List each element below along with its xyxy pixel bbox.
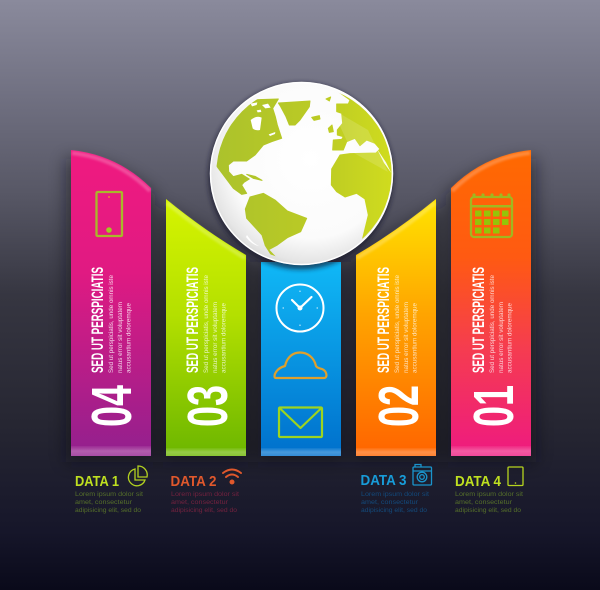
blue band shape: [261, 262, 341, 456]
globe: [210, 82, 413, 265]
iceland and british isles: [312, 116, 320, 120]
caribbean islands: [247, 174, 262, 180]
panel: band 03: [166, 199, 246, 456]
number 02: 02: [367, 385, 431, 427]
icon: tablet: [508, 467, 523, 486]
greenland: [278, 101, 310, 125]
icon: pie chart: [128, 466, 147, 486]
text data 3: [361, 491, 429, 514]
text data 2: Lorem ipsum dolor sit: [171, 491, 239, 498]
heading 03: SED UT PERSPICIATIS: [184, 267, 202, 373]
body text 02: Sed ut perspiciatis, unde omnis iste: [394, 275, 401, 373]
body text 04: Sed ut perspiciatis, unde omnis iste: [108, 275, 115, 373]
band 01 shape: [451, 150, 531, 456]
body text 04: natus error sit voluptatem: [117, 302, 124, 373]
icon: smartphone: [96, 192, 122, 236]
globe glint: [246, 235, 259, 246]
body text 01: Sed ut perspiciatis, unde omnis iste: [489, 275, 496, 373]
body text 01: accusantium doloremque: [506, 303, 514, 373]
body text 01: natus error sit voluptatem: [498, 302, 505, 373]
icon: wifi: [223, 470, 241, 484]
text data 1: Lorem ipsum dolor sit: [75, 491, 143, 498]
south america: [245, 193, 307, 262]
body text 02: accusantium doloremque: [412, 303, 418, 373]
text data 2: adipisicing elit, sed do: [171, 507, 238, 514]
text data 2: amet, consectetur: [171, 499, 228, 506]
icon: clock: [276, 284, 324, 332]
heading data 2: DATA 2: [170, 473, 216, 490]
text data 1: amet, consectetur: [75, 499, 132, 506]
heading 04: SED UT PERSPICIATIS: [89, 267, 107, 373]
data block 1: [75, 466, 147, 514]
icon: cloud: [274, 352, 326, 378]
data block 4: [455, 467, 523, 514]
heading data 1: DATA 1: [75, 473, 119, 490]
band 02 shape: [356, 199, 436, 456]
body text 03: [203, 275, 228, 373]
body text 03: Sed ut perspiciatis, unde omnis iste: [203, 275, 210, 373]
data block 2: [170, 470, 241, 514]
text data 3: Lorem ipsum dolor sit: [361, 491, 429, 498]
heading 02: SED UT PERSPICIATIS: [375, 267, 393, 373]
body text 04: accusantium doloremque: [126, 303, 132, 373]
icon: calendar: [471, 193, 512, 237]
arctic islands and hudson bay: [251, 102, 391, 173]
body text 02: [394, 275, 418, 373]
heading data 3: DATA 3: [360, 472, 406, 489]
text data 4: [455, 491, 523, 514]
continents: [216, 92, 392, 256]
panel: band 04: [71, 150, 151, 456]
data block 3: [360, 464, 432, 514]
icon: camera: [413, 464, 432, 485]
panel: blue centre band: [261, 262, 341, 456]
number 01: 01: [462, 385, 526, 427]
text data 1: adipisicing elit, sed do: [75, 507, 142, 514]
body text 04: [108, 275, 132, 373]
heading data 4: DATA 4: [455, 473, 502, 490]
icon: envelope: [279, 408, 322, 437]
globe glare: [332, 109, 388, 172]
body text 01: [489, 275, 514, 373]
band 03 shape: [166, 199, 246, 456]
band shadows: [66, 158, 536, 462]
number 03: 03: [176, 385, 240, 427]
body text 02: natus error sit voluptatem: [403, 302, 410, 373]
globe shadow on blue band: [208, 82, 394, 270]
text data 4: adipisicing elit, sed do: [455, 507, 522, 514]
number 04: 04: [80, 385, 144, 427]
panel: band 02: [356, 199, 436, 456]
heading 01: SED UT PERSPICIATIS: [470, 267, 488, 373]
text data 4: amet, consectetur: [455, 499, 512, 506]
text data 3: adipisicing elit, sed do: [361, 507, 428, 514]
body text 03: natus error sit voluptatem: [212, 302, 219, 373]
text data 3: amet, consectetur: [361, 499, 418, 506]
north america: [210, 99, 282, 194]
body text 03: accusantium doloremque: [220, 303, 228, 373]
band 04 shape: [71, 150, 151, 456]
globe sphere: [210, 82, 393, 265]
globe rim: [210, 82, 392, 264]
text data 4: Lorem ipsum dolor sit: [455, 491, 523, 498]
text data 2: [171, 491, 239, 514]
text data 1: [75, 491, 143, 514]
panel: band 01: [451, 150, 531, 456]
eurasia and africa: [330, 92, 392, 239]
